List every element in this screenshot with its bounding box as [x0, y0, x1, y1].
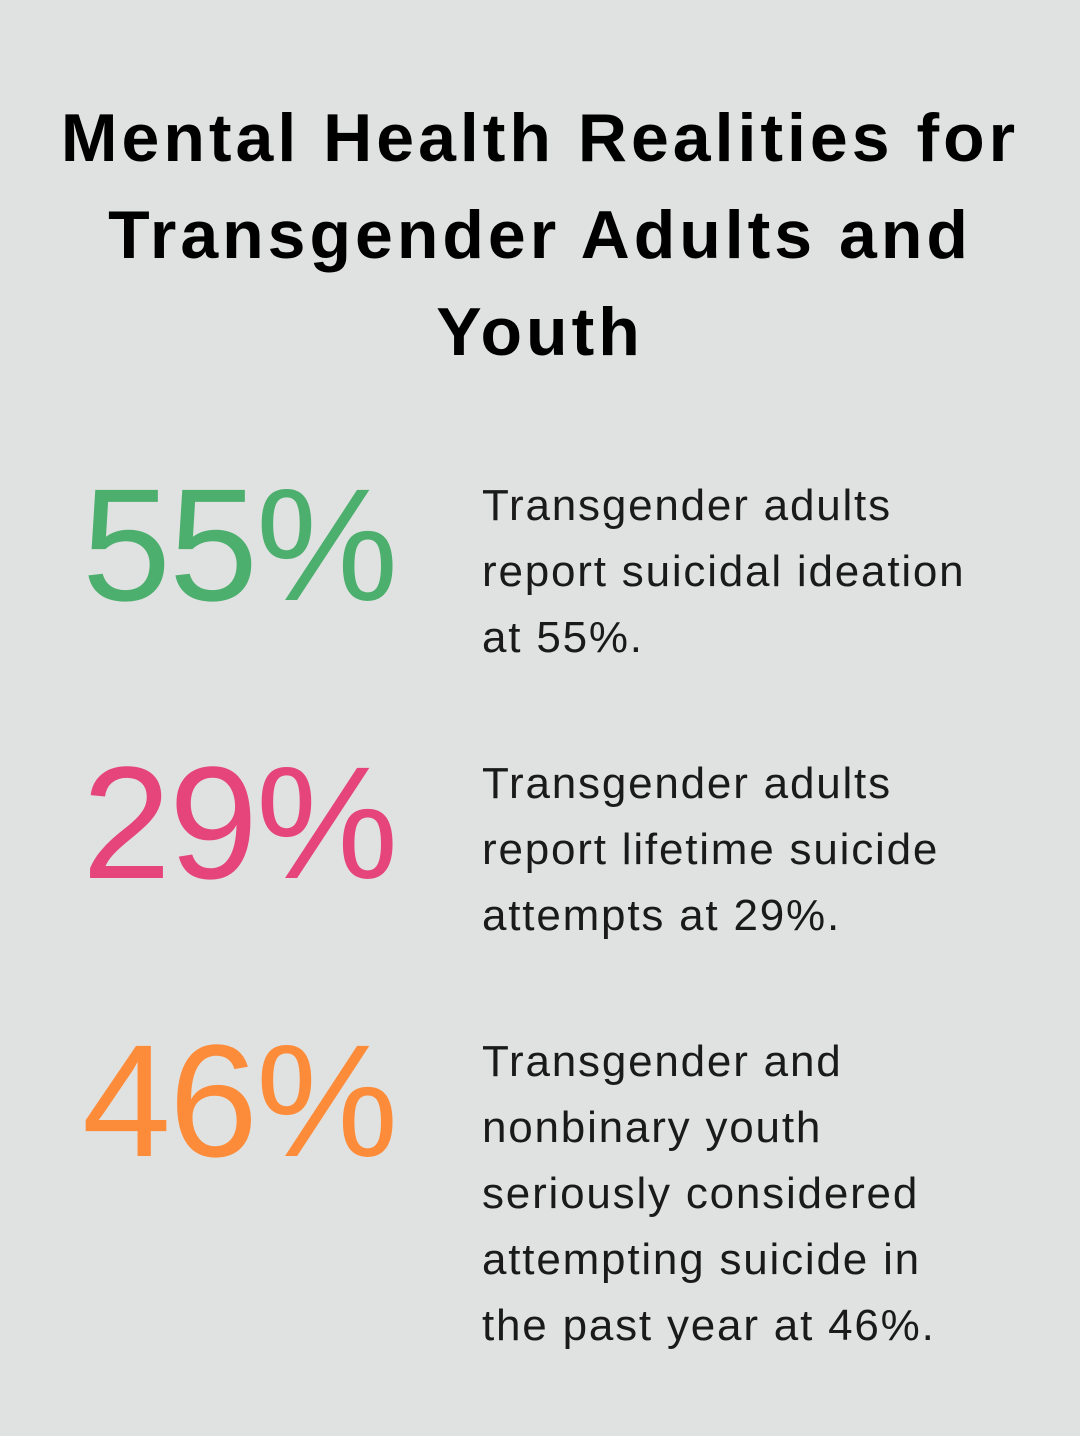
title: Mental Health Realities for [61, 100, 1019, 176]
stat: 46%: 46% [82, 1011, 396, 1190]
text: 29% description [482, 759, 939, 940]
title [61, 100, 1019, 370]
text: 55% description: Transgender adults [482, 481, 892, 530]
stat: 29%: 29% [82, 733, 396, 912]
text: 55% description: report suicidal ideation [482, 547, 965, 596]
text: 55% description: at 55%. [482, 613, 644, 662]
text: 46% description: seriously considered [482, 1169, 919, 1218]
stat: 55%: 55% [82, 455, 396, 634]
text: 29% description: attempts at 29%. [482, 891, 841, 940]
text: 55% description [482, 481, 965, 662]
text: 29% description: report lifetime suicide [482, 825, 939, 874]
text: 46% description: Transgender and [482, 1037, 842, 1086]
text: 46% description: nonbinary youth [482, 1103, 822, 1152]
text: 46% description: the past year at 46%. [482, 1301, 936, 1350]
text: 29% description: Transgender adults [482, 759, 892, 808]
title: Youth [436, 294, 644, 370]
title: Transgender Adults and [108, 197, 972, 273]
text: 46% description: attempting suicide in [482, 1235, 921, 1284]
text: 46% description [482, 1037, 936, 1350]
